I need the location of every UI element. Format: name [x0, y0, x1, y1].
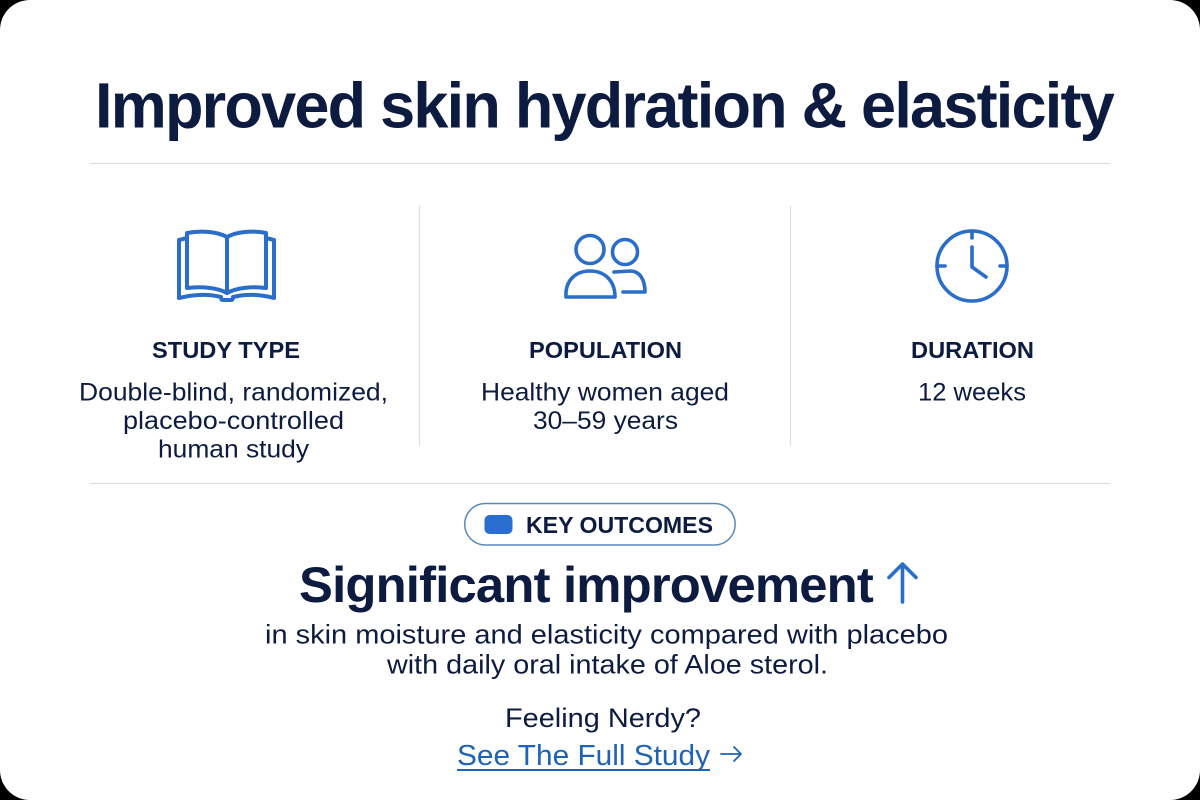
badge: key outcomes: [465, 504, 735, 545]
icon: open book: [179, 232, 274, 300]
badge: key outcomes: KEY OUTCOMES: [526, 512, 713, 538]
heading: duration: DURATION: [911, 337, 1034, 363]
icon: clock: [937, 231, 1007, 301]
text: feeling nerdy: Feeling Nerdy?: [505, 703, 701, 733]
text: study type description: [79, 378, 388, 464]
text: outcome description: with daily oral intake of Aloe sterol.: [386, 650, 828, 680]
panel: study type: [79, 232, 388, 464]
icon: right arrow: [721, 747, 741, 761]
heading: population: POPULATION: [529, 337, 682, 363]
text: outcome description: [265, 620, 948, 680]
text: study type description: placebo-controlled: [123, 407, 344, 435]
text: study type description: human study: [158, 436, 310, 464]
panel: population: [481, 236, 729, 435]
title: Improved skin hydration & elasticity: [95, 70, 1115, 142]
text: study type description: Double-blind, randomized,: [79, 378, 388, 406]
text: outcome description: in skin moisture and elasticity compared with placebo: [265, 620, 948, 650]
link: see the full study: See The Full Study: [457, 740, 711, 772]
text: duration value: 12 weeks: [918, 378, 1026, 406]
panel: duration: [911, 231, 1034, 406]
heading: study type: STUDY TYPE: [152, 337, 300, 363]
heading: significant improvement: Significant improvement: [299, 557, 874, 613]
text: population description: [481, 378, 729, 435]
icon: two people: [566, 236, 645, 297]
text: population description: 30–59 years: [533, 407, 678, 435]
icon: up arrow: [889, 564, 916, 602]
text: population description: Healthy women aged: [481, 378, 729, 406]
